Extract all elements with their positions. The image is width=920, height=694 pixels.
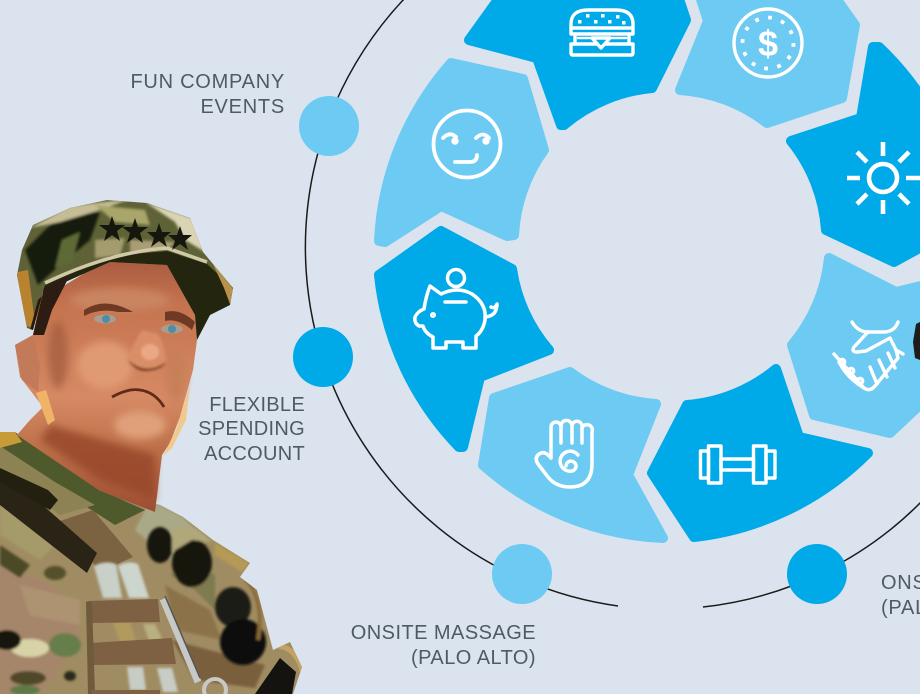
- cap with stars: [17, 199, 234, 340]
- label: onsite massage: ONSITE MASSAGE: [351, 622, 536, 644]
- icon: sun: [847, 142, 920, 214]
- segment: time off: [791, 47, 920, 262]
- label: flexible spending account: SPENDING: [198, 418, 305, 440]
- radio: [215, 578, 266, 665]
- icon: piggy bank: [415, 270, 497, 348]
- label: fun company events: [130, 71, 285, 118]
- label: flexible spending account: FLEXIBLE: [209, 394, 305, 416]
- label: fun company events: FUN COMPANY: [130, 71, 285, 93]
- icon: dumbbell: [700, 446, 775, 483]
- icon: handshake: [834, 322, 903, 390]
- buckle: [255, 658, 296, 694]
- dot: flexible spending account: [293, 327, 353, 387]
- glow sticks: [94, 562, 178, 692]
- dot: onsite massage: [492, 544, 552, 604]
- mouth: [112, 390, 164, 407]
- icon: smiling face: [434, 110, 500, 178]
- label: flexible spending account: [198, 394, 305, 465]
- label: onsite gym, cropped: [881, 572, 920, 618]
- dot: onsite gym: [787, 544, 847, 604]
- vest strap: [60, 510, 133, 572]
- segment: food: [469, 0, 686, 125]
- label: onsite massage: (PALO ALTO): [411, 646, 536, 668]
- segment: onsite massage: [483, 372, 663, 538]
- label: flexible spending account: ACCOUNT: [204, 443, 305, 465]
- segment: partnership: [792, 258, 920, 433]
- icon: hand with spiral: [536, 420, 592, 487]
- outer ring line: [305, 0, 920, 607]
- label: onsite massage: [351, 622, 536, 668]
- icon: dollar coin: $: [758, 23, 778, 64]
- brows: [84, 303, 133, 316]
- soldier body and vest: [0, 430, 310, 694]
- face shading: [40, 288, 186, 500]
- eyes: [94, 314, 116, 324]
- pouch panels: [147, 526, 265, 688]
- velcro pouch: [86, 599, 176, 694]
- illustration: soldier in camouflage uniform: [0, 200, 302, 694]
- head and neck: [15, 258, 198, 512]
- icon: dollar coin: [734, 9, 802, 77]
- segment: fun company events: [379, 63, 544, 242]
- dot: fun company events: [299, 96, 359, 156]
- green collar strap: [0, 432, 145, 525]
- rim light: [36, 390, 55, 425]
- carabiner and pen: [163, 596, 226, 694]
- photo fragment at right edge: [913, 322, 920, 360]
- segment: onsite gym: [652, 369, 868, 537]
- segment: compensation: [680, 0, 855, 123]
- segment: flexible spending account: [379, 231, 549, 447]
- label: fun company events: EVENTS: [200, 96, 285, 118]
- four stars: [99, 216, 192, 250]
- icon: burger: [571, 10, 633, 55]
- nose: [127, 330, 166, 371]
- hair shadow under cap: [33, 275, 70, 335]
- ear: [15, 335, 40, 392]
